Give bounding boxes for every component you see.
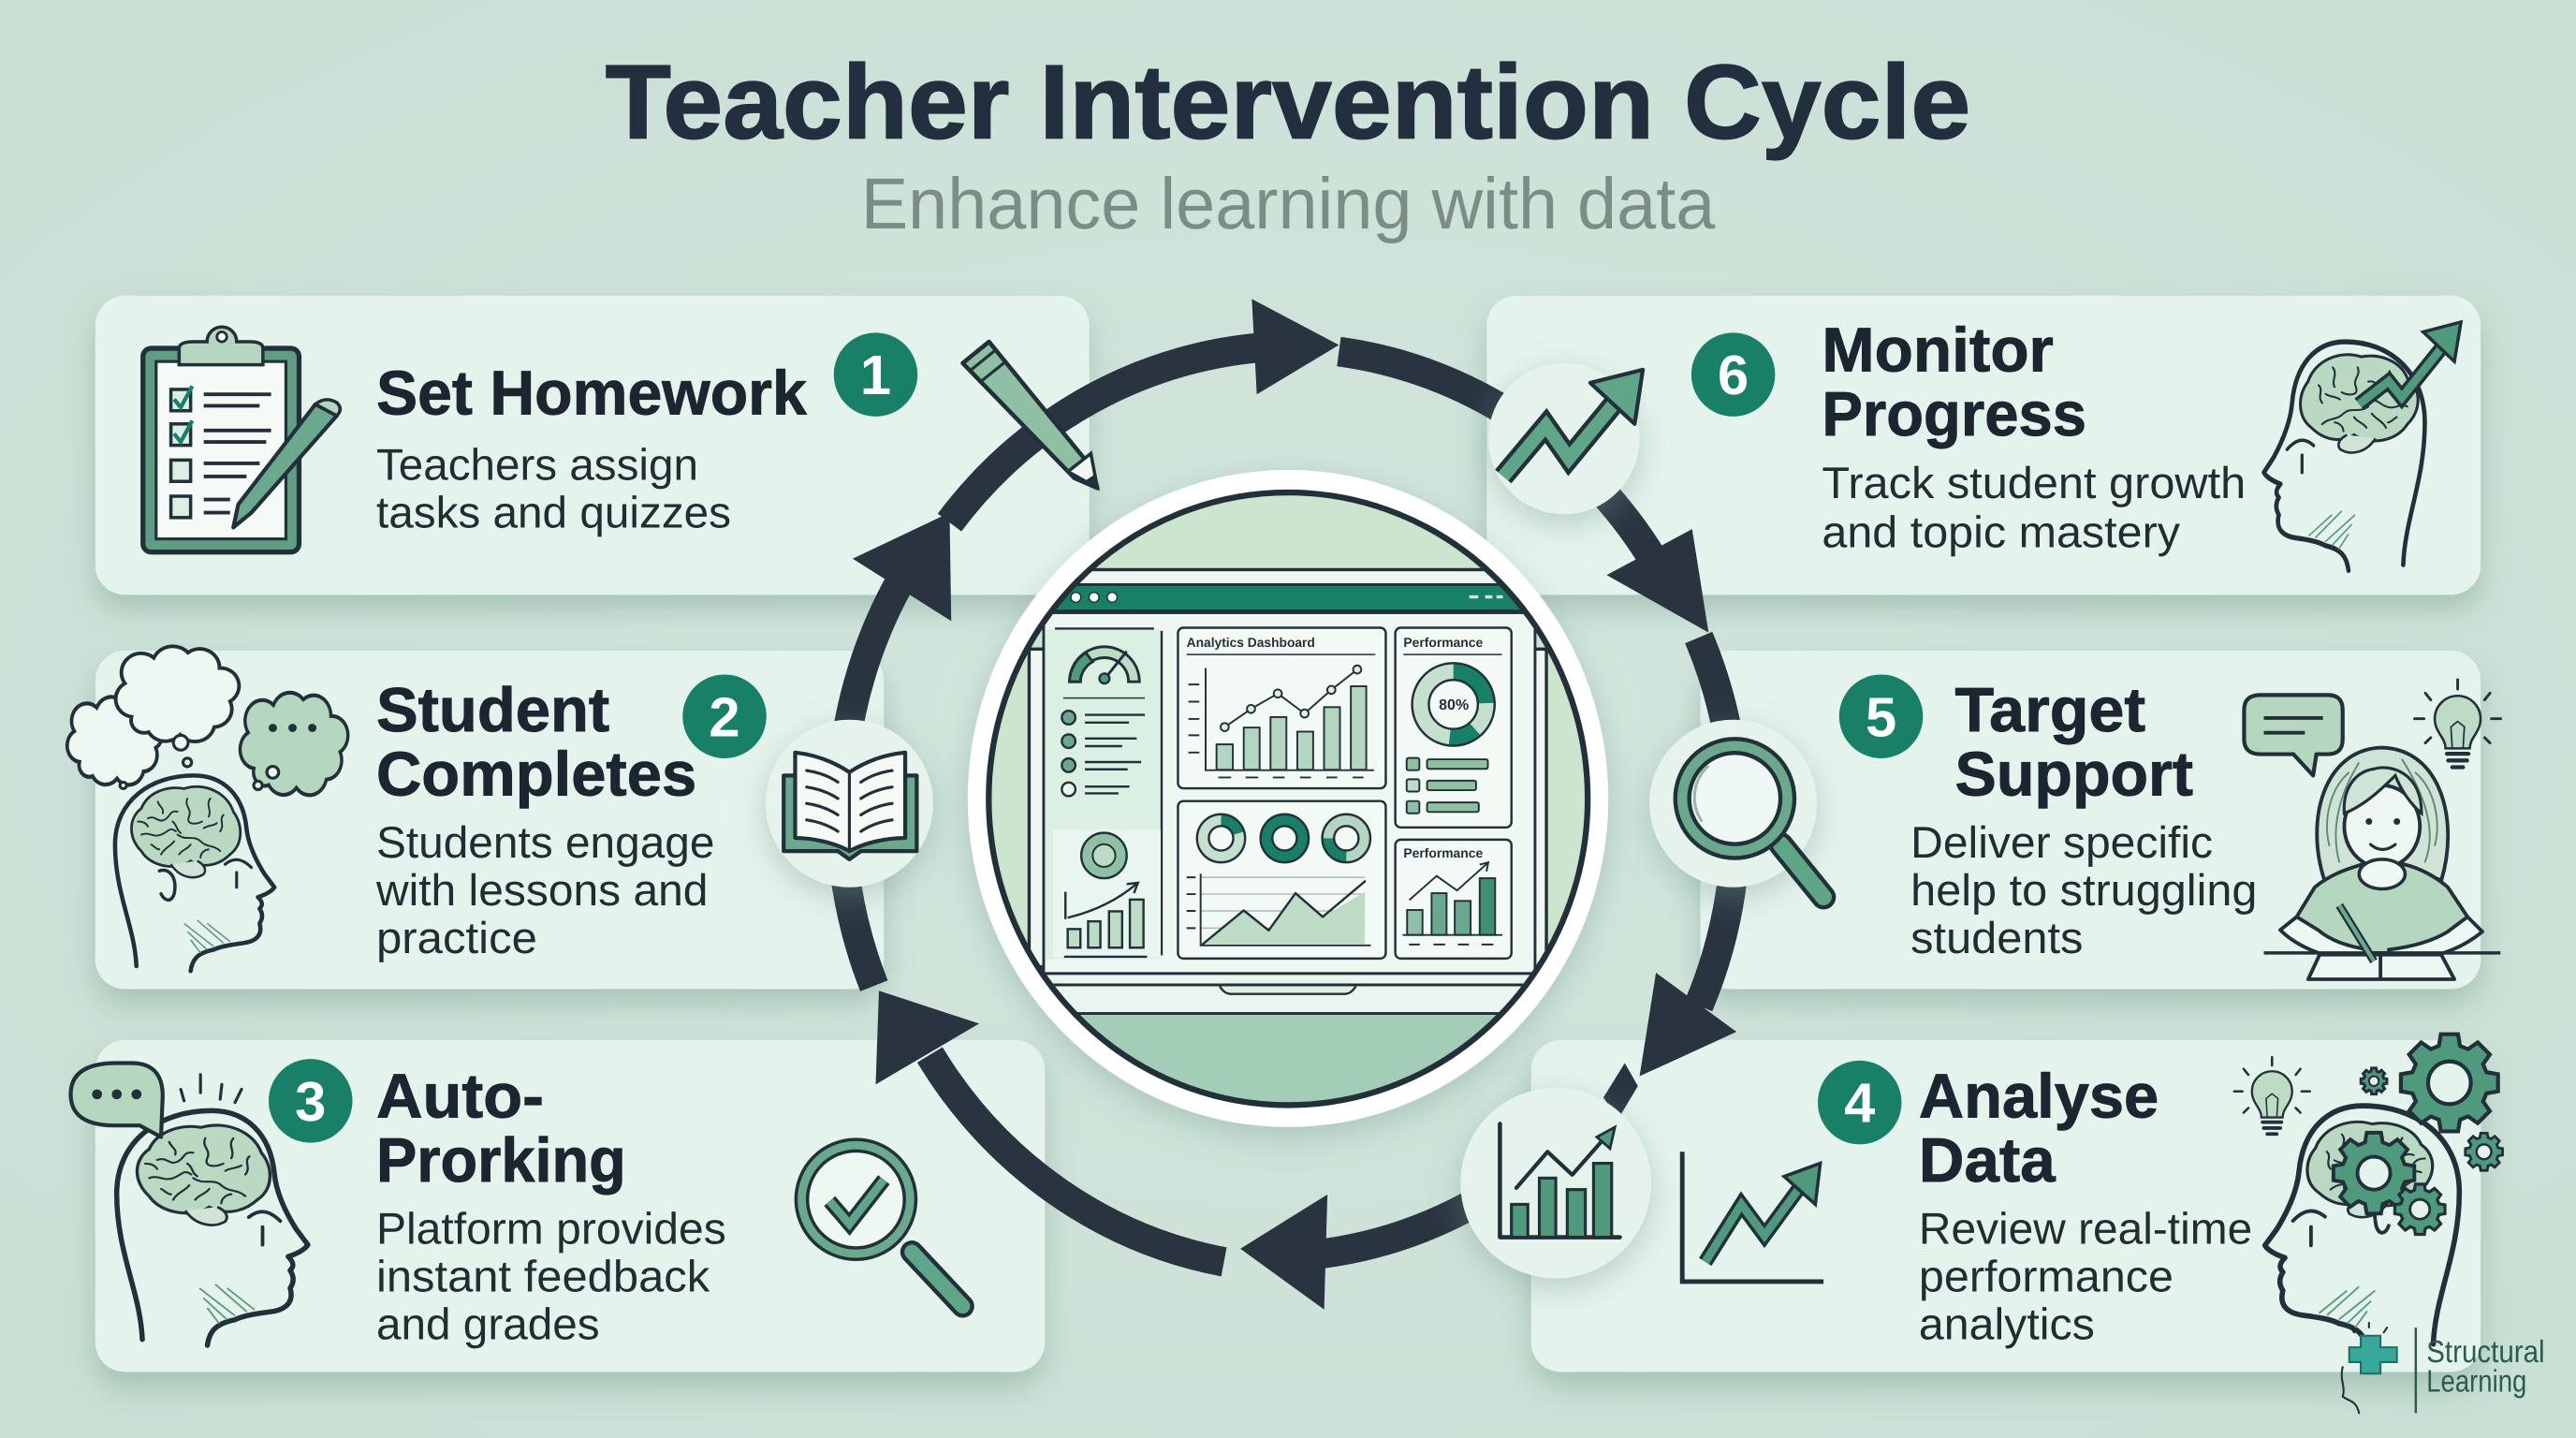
description: step 1: tasks and quizzes: [376, 488, 731, 537]
heading: monitor progress: [1822, 317, 2086, 450]
description: step 3: [376, 1204, 726, 1349]
node: rising arrow: [1488, 363, 1643, 514]
panel: step 6 content: [1691, 317, 2461, 570]
description: step 2: with lessons and: [374, 866, 708, 916]
panel: central dashboard: Analytics Dashboard: [1187, 636, 1315, 650]
badge 4: 4: [1844, 1073, 1875, 1136]
icon: light bulb: [2234, 1057, 2310, 1134]
cycle arrows: [841, 299, 1736, 1310]
node: magnifying glass: [1649, 720, 1823, 897]
icon: magnifying glass with check: [802, 1145, 963, 1306]
logo: structural learning: [2342, 1323, 2545, 1413]
icon: pencil on cycle: [963, 342, 1097, 488]
badge 6: 6: [1718, 345, 1749, 407]
panel: step 4 card background: [1531, 1040, 2481, 1372]
panel: step 2 card background: [95, 651, 884, 990]
heading: student completes: Completes: [376, 741, 696, 810]
node: open book: [766, 720, 933, 888]
description: step 3: Platform provides: [376, 1204, 726, 1254]
panel: step 5 content: [1839, 674, 2501, 979]
heading: student completes: Student: [376, 677, 610, 746]
badge 4: [1818, 1061, 1902, 1144]
logo: structural learning: Structural: [2426, 1336, 2545, 1371]
panel: step 4 content: [1682, 1034, 2545, 1413]
description: step 4: [1919, 1204, 2252, 1349]
description: step 4: analytics: [1919, 1299, 2095, 1349]
description: step 2: Students engage: [376, 818, 714, 868]
heading: analyse data: [1919, 1064, 2159, 1196]
icon: head with speech bubble: [71, 1064, 308, 1345]
icon: head with thought clouds: [67, 646, 348, 971]
description: step 5: students: [1910, 914, 2083, 962]
panel: step 5 card background: [1701, 651, 2481, 990]
badge 5: [1839, 674, 1923, 758]
icon: growth chart: [1682, 1152, 1823, 1282]
badge 2: 2: [709, 687, 740, 749]
description: step 3: instant feedback: [376, 1252, 710, 1301]
panel: step 1 content: [143, 327, 917, 552]
description: step 5: Deliver specific: [1910, 818, 2213, 868]
description: step 3: and grades: [376, 1299, 600, 1349]
panel: step 1 card background: [95, 296, 1090, 594]
heading: student completes: [376, 677, 696, 810]
badge 3: [269, 1059, 353, 1143]
subtitle: Enhance learning with data: [861, 165, 1716, 244]
panel: step 3 card background: [95, 1040, 1045, 1372]
badge 5: 5: [1866, 687, 1896, 749]
title: Teacher Intervention Cycle: [606, 43, 1970, 161]
badge 3: 3: [295, 1071, 326, 1134]
description: step 2: practice: [376, 914, 537, 962]
panel: step 6 card background: [1486, 296, 2481, 594]
description: step 4: Review real-time: [1919, 1204, 2252, 1254]
icon: left-facing head with gears: [2265, 1034, 2503, 1350]
logo: structural learning: Learning: [2426, 1365, 2526, 1400]
panel: step 2 content: [67, 646, 767, 971]
heading: analyse data: Analyse: [1919, 1064, 2159, 1132]
description: step 6: [1822, 459, 2246, 557]
heading: set homework: Set Homework: [376, 360, 808, 429]
panel: central dashboard: 80%: [1439, 697, 1469, 713]
badge 1: 1: [860, 345, 891, 407]
badge 6: [1691, 332, 1775, 417]
panel: central dashboard: Performance: [1403, 636, 1483, 650]
panel: central dashboard: [968, 470, 1608, 1127]
heading: target support: Target: [1955, 677, 2146, 746]
heading: monitor progress: Monitor: [1822, 317, 2054, 386]
badge 1: [834, 332, 917, 417]
heading: analyse data: Data: [1919, 1127, 2056, 1196]
icon: student writing: [2263, 748, 2500, 979]
description: step 2: [374, 818, 714, 962]
description: step 1: Teachers assign: [376, 440, 698, 490]
badge 2: [682, 674, 767, 758]
icon: light bulb: [2415, 680, 2501, 768]
description: step 6: Track student growth: [1822, 459, 2246, 507]
node: bar chart: [1460, 1088, 1651, 1278]
icon: clipboard and pencil: [143, 327, 340, 552]
heading: auto-prorking: Prorking: [376, 1127, 626, 1196]
panel: central dashboard: Performance: [1403, 846, 1483, 860]
heading: auto-prorking: Auto-: [376, 1064, 544, 1132]
icon: left-facing head with growth arrow: [2264, 322, 2461, 570]
heading: monitor progress: Progress: [1822, 381, 2086, 450]
heading: target support: Support: [1955, 741, 2194, 810]
description: step 5: [1910, 818, 2257, 962]
description: step 1: [376, 440, 731, 537]
description: step 6: and topic mastery: [1822, 507, 2181, 557]
description: step 4: performance: [1919, 1252, 2174, 1301]
description: step 5: help to struggling: [1910, 866, 2257, 916]
heading: target support: [1955, 677, 2194, 810]
heading: auto-prorking: [376, 1064, 626, 1196]
panel: step 3 content: [71, 1059, 963, 1349]
icon: speech bubble: [2244, 695, 2343, 775]
